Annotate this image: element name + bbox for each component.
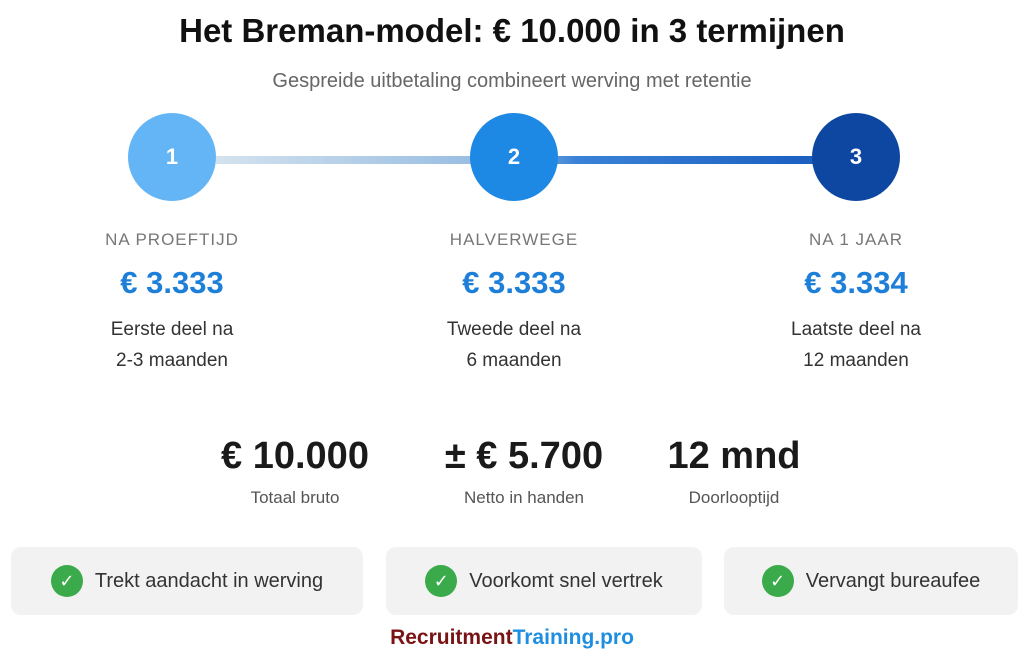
step 2 text [447, 230, 582, 371]
stat total: € 10.000 [221, 435, 369, 477]
step 2 circle: 2 [508, 144, 520, 169]
stat duration: 12 mnd [667, 435, 801, 477]
step 2 text: € 3.333 [462, 265, 566, 300]
stat net: ± € 5.700 [445, 435, 603, 477]
benefit 2 [386, 547, 702, 615]
step 1 text: 2-3 maanden [116, 350, 228, 371]
benefit 3: Vervangt bureaufee [806, 570, 980, 592]
step 2 text: 6 maanden [466, 350, 562, 371]
stat net: Netto in handen [464, 488, 584, 507]
step 3 text: € 3.334 [804, 265, 908, 300]
logo: RecruitmentTraining.pro [390, 626, 634, 649]
timeline line [216, 156, 816, 164]
stat duration [667, 435, 801, 507]
subtitle: Gespreide uitbetaling combineert werving met retentie [272, 70, 752, 92]
step 3 text [791, 230, 921, 371]
step 1 text: Eerste deel na [111, 319, 233, 340]
step 3 circle [812, 113, 900, 201]
step 2 circle [470, 113, 558, 201]
benefit 1: Trekt aandacht in werving [95, 570, 323, 592]
title: Het Breman-model: € 10.000 in 3 termijnen [179, 12, 845, 49]
step 2 text: Tweede deel na [447, 319, 581, 340]
benefit 2: Voorkomt snel vertrek [469, 570, 663, 592]
stat total [221, 435, 369, 507]
benefit 3: ✓ [770, 571, 785, 591]
step 1 text [105, 230, 239, 371]
step 3 text: NA 1 JAAR [809, 230, 903, 249]
step 1 circle [128, 113, 216, 201]
benefit 1 [11, 547, 363, 615]
step 1 text: € 3.333 [120, 265, 224, 300]
benefit 2: ✓ [434, 571, 449, 591]
step 3 text: Laatste deel na [791, 319, 921, 340]
benefit 1: ✓ [59, 571, 74, 591]
step 1 text: NA PROEFTIJD [105, 230, 239, 249]
benefit 3 [724, 547, 1018, 615]
step 3 circle: 3 [850, 144, 862, 169]
stat net [445, 435, 603, 507]
stat total: Totaal bruto [251, 488, 339, 507]
step 1 circle: 1 [166, 144, 178, 169]
stat duration: Doorlooptijd [689, 488, 779, 507]
step 3 text: 12 maanden [803, 350, 909, 371]
step 2 text: HALVERWEGE [450, 230, 578, 249]
